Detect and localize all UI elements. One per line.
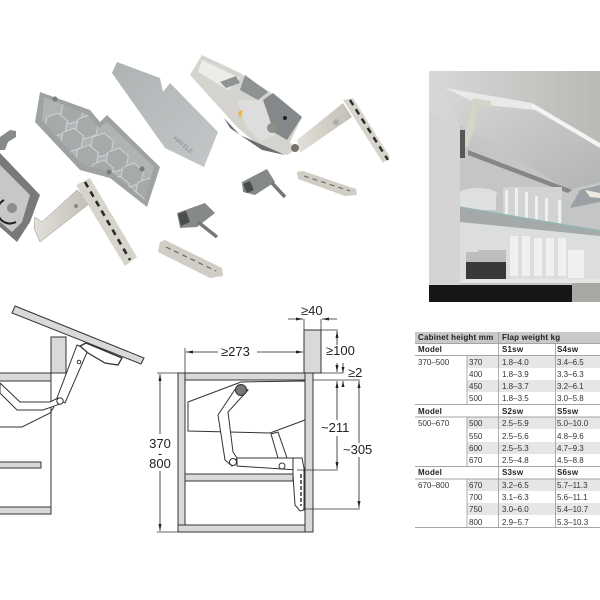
product photo: connector 2 (177, 203, 217, 237)
product photo: mounting plate 2 (158, 240, 223, 278)
table: cabinet height and flap weight: 5.0–10.0 (557, 419, 589, 428)
table: cabinet height and flap weight: 400 (469, 370, 483, 379)
product photo: left lift mechanism (0, 130, 137, 266)
table: cabinet height and flap weight (415, 332, 600, 528)
dimension: 100: ≥100 (326, 343, 355, 358)
photo: kitchen cabinet with open flap (429, 71, 600, 302)
technical drawing: flap open side view (0, 306, 144, 514)
table: cabinet height and flap weight: 2.5–4.8 (502, 456, 529, 465)
table: cabinet height and flap weight: Model (418, 345, 442, 354)
table: cabinet height and flap weight: 5.7–11.3 (557, 481, 588, 490)
technical drawing: cabinet dimensions (157, 318, 360, 532)
table: cabinet height and flap weight: 500–670 (418, 419, 450, 428)
table: cabinet height and flap weight: S2sw (502, 407, 524, 416)
table: cabinet height and flap weight: 750 (469, 505, 483, 514)
table: cabinet height and flap weight: 5.4–10.7 (557, 505, 589, 514)
dimension: 2: ≥2 (348, 365, 362, 380)
table: cabinet height and flap weight: S1sw (502, 345, 524, 354)
table: cabinet height and flap weight: 3.0–5.8 (557, 394, 584, 403)
table: cabinet height and flap weight: 550 (469, 432, 483, 441)
glasses and plates on upper shelf (459, 187, 562, 226)
dimension: height range: 370 (149, 436, 171, 451)
table: cabinet height and flap weight: 450 (469, 382, 483, 391)
product photo: plain cover (112, 62, 218, 167)
extension lines (157, 319, 360, 532)
table: cabinet height and flap weight: 3.1–6.3 (502, 493, 529, 502)
table: cabinet height and flap weight: 3.0–6.0 (502, 505, 529, 514)
dimension: 305: ~305 (343, 442, 372, 457)
table: cabinet height and flap weight: 670–800 (418, 481, 450, 490)
cups (466, 250, 506, 279)
product photo: honeycomb cover (35, 92, 160, 207)
table: cabinet height and flap weight: Model (418, 407, 442, 416)
product photo: connector 1 (242, 169, 285, 197)
dimension: 40: ≥40 (301, 303, 323, 318)
table: cabinet height and flap weight: 500 (469, 394, 483, 403)
dimension: height range: - (158, 446, 162, 461)
dimension arrows (160, 319, 359, 531)
product photo: right lift mechanism (190, 55, 390, 163)
table: cabinet height and flap weight: S5sw (557, 407, 579, 416)
table: cabinet height and flap weight: 600 (469, 444, 483, 453)
table: cabinet height and flap weight: Flap weight kg (502, 333, 560, 342)
table: cabinet height and flap weight: Cabinet height mm (418, 333, 493, 342)
table: cabinet height and flap weight: 500 (469, 419, 483, 428)
lift mechanism (188, 381, 305, 511)
dimension: height range: 800 (149, 456, 171, 471)
table: cabinet height and flap weight: 5.6–11.1 (557, 493, 588, 502)
table: cabinet height and flap weight: Model (418, 468, 442, 477)
table: cabinet height and flap weight: 1.8–3.7 (502, 382, 529, 391)
table: cabinet height and flap weight: 370 (469, 358, 483, 367)
table: cabinet height and flap weight: 2.5–5.3 (502, 444, 529, 453)
table: cabinet height and flap weight: 4.5–8.8 (557, 456, 584, 465)
table: cabinet height and flap weight: 2.5–5.6 (502, 432, 529, 441)
table: cabinet height and flap weight: S4sw (557, 345, 579, 354)
table: cabinet height and flap weight: 1.8–4.0 (502, 358, 529, 367)
dimension labels: ≥273 (221, 344, 250, 359)
table: cabinet height and flap weight: 670 (469, 481, 483, 490)
table: cabinet height and flap weight: 4.7–9.3 (557, 444, 584, 453)
table: cabinet height and flap weight: 5.3–10.3 (557, 518, 589, 527)
table: cabinet height and flap weight: 4.8–9.6 (557, 432, 584, 441)
table: cabinet height and flap weight: 700 (469, 493, 483, 502)
table: cabinet height and flap weight: 670 (469, 456, 483, 465)
product photo: mounting plate 1 (297, 171, 357, 196)
table: cabinet height and flap weight: 800 (469, 518, 483, 527)
table: cabinet height and flap weight: 370–500 (418, 358, 450, 367)
table: cabinet height and flap weight: S3sw (502, 468, 524, 477)
dimension: 211: ~211 (321, 420, 349, 435)
table: cabinet height and flap weight: 3.3–6.3 (557, 370, 584, 379)
wine glasses (510, 236, 584, 278)
table: cabinet height and flap weight: S6sw (557, 468, 579, 477)
cover logo text: HÄFELE (172, 135, 194, 156)
table: cabinet height and flap weight: 2.9–5.7 (502, 518, 529, 527)
table: cabinet height and flap weight: 1.8–3.9 (502, 370, 529, 379)
table: cabinet height and flap weight: 1.8–3.5 (502, 394, 529, 403)
table: cabinet height and flap weight: 3.2–6.1 (557, 382, 584, 391)
table: cabinet height and flap weight: 3.2–6.5 (502, 481, 529, 490)
table: cabinet height and flap weight: 3.4–6.5 (557, 358, 584, 367)
table: cabinet height and flap weight: 2.5–5.9 (502, 419, 529, 428)
